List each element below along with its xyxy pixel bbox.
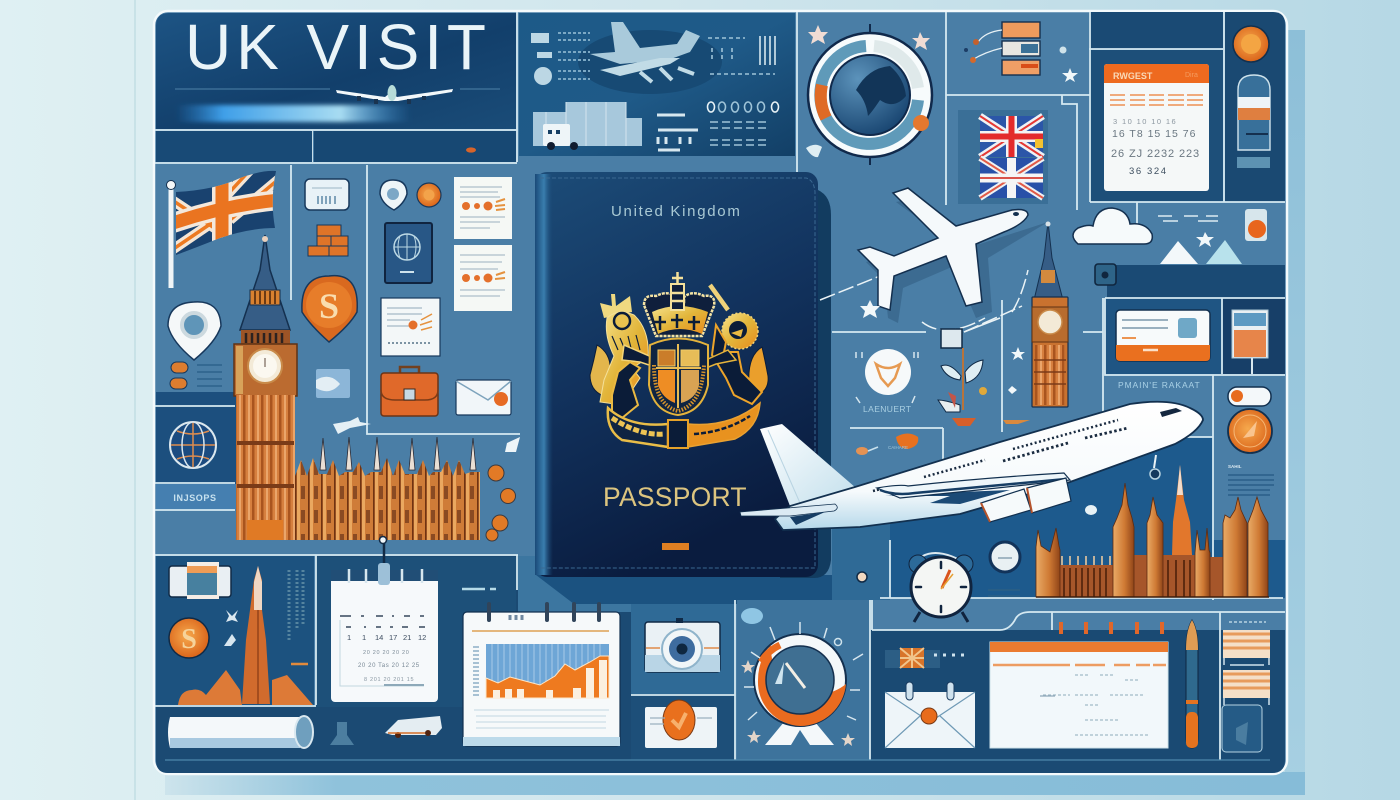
icon: sign board <box>1232 310 1268 374</box>
icon: id card <box>1116 310 1210 361</box>
parliament left <box>295 437 480 540</box>
icon: small screen and plant <box>938 318 1000 426</box>
icon: capsule <box>1237 75 1270 168</box>
panel: hanging calendar: 21 <box>403 633 411 642</box>
panel: hanging calendar: 17 <box>389 633 397 642</box>
schematic plane <box>590 22 700 82</box>
icon: gauge stars <box>741 638 855 746</box>
icon: dark box <box>1222 705 1262 752</box>
icon: briefcase <box>381 367 438 416</box>
icon: stars near small plane <box>860 300 1025 394</box>
small dashes <box>462 588 496 590</box>
big ben right <box>1032 222 1068 407</box>
flight path lines <box>820 270 1028 332</box>
icon: document two <box>454 245 512 311</box>
panel: calendar august: 3 10 10 10 16 <box>1113 117 1177 126</box>
motto ribbon <box>608 403 760 448</box>
engines <box>981 489 1031 522</box>
icon: orange coin s: S <box>181 624 197 655</box>
panel: hanging calendar: 1 <box>347 633 351 642</box>
windows upper <box>924 420 1118 477</box>
icon: white stamp <box>316 369 350 398</box>
schematic icons left <box>531 33 590 85</box>
panel: left flag <box>166 165 280 288</box>
panel: calendar august: 36 324 <box>1129 166 1168 177</box>
gear <box>1154 455 1156 468</box>
icon: small cloud badge <box>741 608 763 624</box>
icon: orange ticks <box>1061 622 1162 634</box>
right lion <box>696 285 762 404</box>
icon: toggle <box>1228 387 1271 406</box>
spire <box>240 235 290 330</box>
icon: lion round badge <box>856 349 918 403</box>
icon: white pin <box>168 302 221 360</box>
wing shadow <box>885 490 1010 504</box>
panel: calendar august: Dira <box>1185 72 1198 79</box>
panel: lower left icons <box>169 562 313 705</box>
dark panels and dividers <box>155 12 1285 773</box>
tall tower <box>242 566 270 704</box>
panel: passport <box>535 172 818 577</box>
icon: cross and house <box>226 610 238 622</box>
icon: stacked union flags <box>958 110 1048 204</box>
stabilizer shadow <box>790 512 825 525</box>
left leaf <box>590 345 612 398</box>
tail fin <box>760 424 856 506</box>
icon: ticket card <box>305 179 349 210</box>
icon: camera front <box>169 562 231 599</box>
fuselage <box>775 402 1203 530</box>
tall white tipped spires <box>320 437 476 470</box>
right leaf <box>745 347 768 398</box>
tower c <box>1147 497 1163 597</box>
back spire <box>1172 465 1192 555</box>
schematic building <box>533 102 642 150</box>
icon: mountains and star <box>1158 209 1267 264</box>
panel: hanging calendar: 12 <box>418 633 426 642</box>
panel: area chart calendar <box>463 604 620 746</box>
label: laenuert: LAENUERT <box>863 404 911 414</box>
icon: cloud <box>1073 208 1152 244</box>
text label: pmaine rakaat: PMAIN'E RAKAAT <box>1118 380 1201 390</box>
icon: stars and bird near globe <box>806 25 930 157</box>
parliament right <box>1036 465 1269 597</box>
big ben left <box>234 235 297 540</box>
panel: hanging calendar: 8 201 20 201 15 <box>364 677 414 683</box>
icon: envelope small <box>456 380 511 415</box>
infographic card <box>154 11 1287 774</box>
icon: paper roll <box>168 716 313 748</box>
panel: flag strip <box>885 648 965 668</box>
icon: orange coin s <box>169 618 209 658</box>
side text <box>289 570 308 664</box>
note lines right: SAHIL <box>1228 464 1242 469</box>
panel: hanging calendar: 20 20 Tas 20 12 25 <box>358 663 420 669</box>
stabilizer <box>740 504 837 516</box>
tower f <box>1248 497 1268 597</box>
icon: white leaf <box>505 437 520 452</box>
icon: camera key <box>1095 264 1116 285</box>
icon: document one <box>454 177 512 239</box>
icon: round seal <box>988 542 1020 596</box>
icon: orange coin top right <box>1233 26 1269 62</box>
panel: flight schematics <box>519 13 795 156</box>
coat of arms <box>590 272 768 448</box>
icon: orange dots <box>486 465 516 541</box>
icon: alarm clock <box>909 553 973 622</box>
icon: orange s pin: S <box>319 286 339 326</box>
panel: hanging calendar: 1 <box>362 633 366 642</box>
tower e <box>1223 497 1247 597</box>
tower a <box>1036 528 1060 597</box>
tower d <box>1195 528 1210 597</box>
icon: pen <box>1186 620 1198 748</box>
flag lower <box>980 158 1043 198</box>
panel: hanging calendar: 14 <box>375 633 383 642</box>
left lion <box>600 294 664 418</box>
spired wall <box>295 458 480 540</box>
icon: small passport <box>385 223 432 283</box>
icon: sealed envelope <box>885 682 975 748</box>
icon: small plane silhouette <box>333 417 371 434</box>
icon: badge card <box>645 700 717 748</box>
note lines right <box>1228 464 1274 495</box>
icon: gauge with ribbon <box>744 622 863 745</box>
flag upper <box>980 116 1043 157</box>
icon: tiered stand and van <box>330 716 442 745</box>
icon: orange bits: CAIHARE <box>888 445 908 450</box>
icon: connector tags <box>964 22 1078 82</box>
panel: calendar august: 26 ZJ 2232 223 <box>1111 148 1200 160</box>
wing <box>877 473 1070 498</box>
panel: hanging calendar: 20 20 20 20 20 <box>363 650 410 656</box>
passport chip mark <box>662 543 689 550</box>
panel: booking document <box>990 642 1168 748</box>
icon: camera <box>645 618 720 672</box>
icon: striped benches <box>1223 622 1270 705</box>
big airplane <box>740 402 1203 530</box>
title panel <box>156 11 516 162</box>
small cloud right <box>1085 505 1097 515</box>
panel: hanging calendar <box>331 536 438 702</box>
passport word: PASSPORT <box>603 482 747 512</box>
orange hills <box>178 670 313 705</box>
icon: orange bits <box>856 420 1030 455</box>
title text: UK VISIT <box>185 11 491 83</box>
label: injsops: INJSOPS <box>173 493 217 503</box>
cockpit <box>1160 408 1182 417</box>
small bead <box>857 572 867 582</box>
panel: calendar august <box>1104 64 1209 191</box>
icon: globe with ring <box>808 24 932 165</box>
shield belt <box>649 338 708 415</box>
contrail <box>175 89 500 122</box>
icon: orange bricks <box>308 225 348 256</box>
icon: orange pills <box>170 362 222 389</box>
small plane in title <box>336 85 453 104</box>
icon: wire globe <box>170 422 216 468</box>
tower b <box>1113 483 1134 597</box>
walls <box>1060 555 1223 597</box>
icon: orange s pin <box>302 276 357 342</box>
panel: calendar august: RWGEST <box>1113 71 1153 81</box>
central crown <box>644 272 714 336</box>
passport shadow <box>780 190 831 578</box>
small airplane <box>820 188 1048 332</box>
passport country text: United Kingdom <box>611 203 742 220</box>
icon: location pin and coin <box>380 180 441 210</box>
icon: report sheet <box>381 298 440 356</box>
icon: orange medal <box>1228 409 1272 453</box>
schematic data tables <box>657 36 778 150</box>
panel: calendar august: 16 T8 15 15 76 <box>1112 128 1196 140</box>
